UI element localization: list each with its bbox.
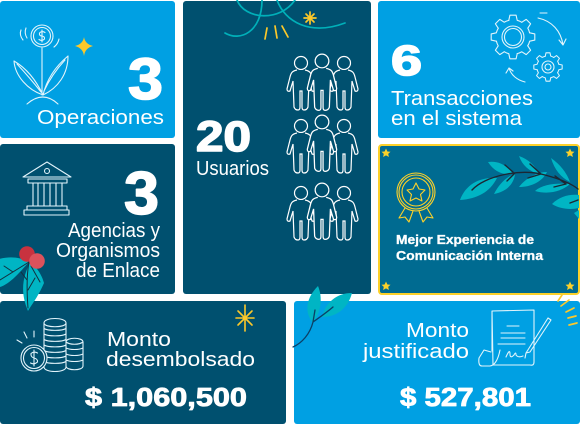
icon: gears and arrows bbox=[491, 13, 566, 82]
label: monto desembolsado: Monto bbox=[107, 329, 171, 351]
text: mejor experiencia bbox=[396, 233, 544, 263]
panel: transacciones bbox=[378, 1, 580, 138]
label: transacciones bbox=[391, 88, 533, 130]
number: 6 transacciones: 6 bbox=[391, 37, 422, 85]
icon: group of people row 2 bbox=[287, 115, 358, 173]
amount: 527,801: $ 527,801 bbox=[400, 382, 531, 412]
number: 20 usuarios: 20 bbox=[196, 113, 251, 161]
panel: monto justificado bbox=[294, 295, 580, 424]
icon: yellow asterisk bbox=[236, 305, 254, 331]
icon: group of people row 1 bbox=[287, 54, 358, 110]
label: monto desembolsado: desembolsado bbox=[106, 349, 255, 371]
decoration: holly leaves and berries bbox=[0, 246, 45, 311]
panel: agencias bbox=[0, 144, 175, 294]
icon: signed document bbox=[479, 310, 551, 366]
label: agencias: Agencias y bbox=[68, 220, 160, 242]
amount: 1,060,500: $ 1,060,500 bbox=[85, 382, 247, 412]
label: agencias: de Enlace bbox=[76, 260, 160, 282]
label: monto justificado: Monto bbox=[406, 320, 469, 342]
decoration: teal curves bbox=[225, 0, 345, 36]
text: mejor experiencia: Mejor Experiencia de bbox=[396, 233, 534, 247]
label: monto justificado bbox=[362, 320, 469, 363]
label: transacciones: Transacciones bbox=[391, 88, 533, 110]
decoration: yellow rays bbox=[265, 12, 316, 39]
panel: operaciones bbox=[0, 1, 175, 138]
text: mejor experiencia: Comunicación Interna bbox=[396, 249, 544, 263]
decoration: leafy branch bbox=[460, 156, 579, 219]
panel: premio bbox=[379, 145, 579, 294]
label: monto desembolsado bbox=[106, 329, 255, 371]
number: 3 agencias: 3 bbox=[124, 160, 159, 227]
label: monto justificado: justificado bbox=[362, 341, 469, 363]
icon: yellow sparkle bbox=[75, 37, 93, 56]
decoration: teal leaves with dark stem bbox=[293, 286, 352, 347]
icon: institution building bbox=[23, 162, 71, 215]
panel: monto desembolsado bbox=[0, 301, 286, 424]
number: 3 operaciones: 3 bbox=[128, 47, 163, 112]
label: usuarios: Usuarios bbox=[196, 158, 269, 180]
icon: medal bbox=[397, 173, 435, 222]
label: transacciones: en el sistema bbox=[391, 108, 523, 130]
icon: coin stacks bbox=[17, 318, 83, 372]
label: agencias: Organismos bbox=[56, 240, 160, 262]
panel: usuarios bbox=[183, 0, 371, 294]
icon: money plant bbox=[14, 25, 68, 104]
label: operaciones: Operaciones bbox=[37, 107, 164, 129]
label: agencias bbox=[56, 220, 160, 282]
icon: corner stars bbox=[382, 148, 574, 290]
icon: group of people row 3 bbox=[287, 183, 358, 240]
decoration: yellow rays bbox=[558, 295, 577, 325]
